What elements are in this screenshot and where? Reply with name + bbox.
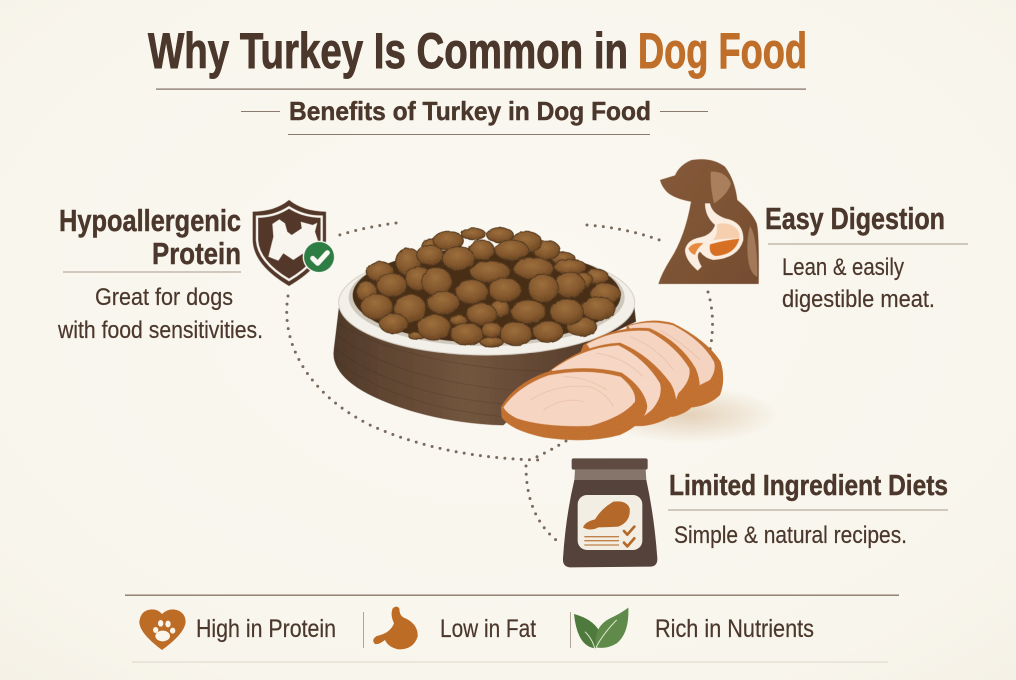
icon: heart with paw — [139, 609, 186, 650]
label: rich in nutrients: Rich in Nutrients — [655, 615, 814, 643]
subtitle: benefits heading: Benefits of Turkey in Dog Food — [289, 96, 651, 126]
block: easy digestion: digestible meat. — [782, 286, 935, 313]
block: hypoallergenic protein: with food sensitivities. — [57, 317, 263, 344]
block: easy digestion: Easy Digestion — [765, 201, 945, 236]
icon: food bag — [563, 458, 657, 567]
turkey slices — [501, 321, 723, 440]
block: limited ingredient diets — [668, 470, 948, 549]
block: easy digestion — [765, 201, 968, 313]
icon: stomach — [373, 607, 418, 649]
title: Dog Food — [638, 23, 807, 79]
icon: leaves — [574, 608, 628, 650]
dotted connector paths — [287, 223, 713, 540]
bowl — [333, 248, 636, 425]
icon: shield with dog and check — [253, 200, 335, 286]
block: hypoallergenic protein: Great for dogs — [95, 284, 233, 311]
block: hypoallergenic protein — [57, 203, 263, 344]
block: limited ingredient diets: Simple & natural recipes. — [674, 522, 907, 549]
floor shadow under turkey — [600, 387, 780, 443]
icon: dog with stomach — [658, 159, 759, 284]
food bowl with kibble and sliced turkey — [333, 228, 723, 440]
block: limited ingredient diets: Limited Ingredient Diets — [669, 470, 948, 502]
block: easy digestion: Lean & easily — [782, 254, 904, 281]
bottom benefits strip — [125, 594, 899, 662]
label: high in protein: High in Protein — [196, 615, 336, 643]
label: low in fat: Low in Fat — [440, 615, 536, 643]
kibble pile — [357, 228, 620, 347]
title: Why Turkey Is Common in — [148, 23, 628, 79]
block: hypoallergenic protein: Hypoallergenic — [59, 203, 241, 238]
block: hypoallergenic protein: Protein — [152, 236, 241, 271]
